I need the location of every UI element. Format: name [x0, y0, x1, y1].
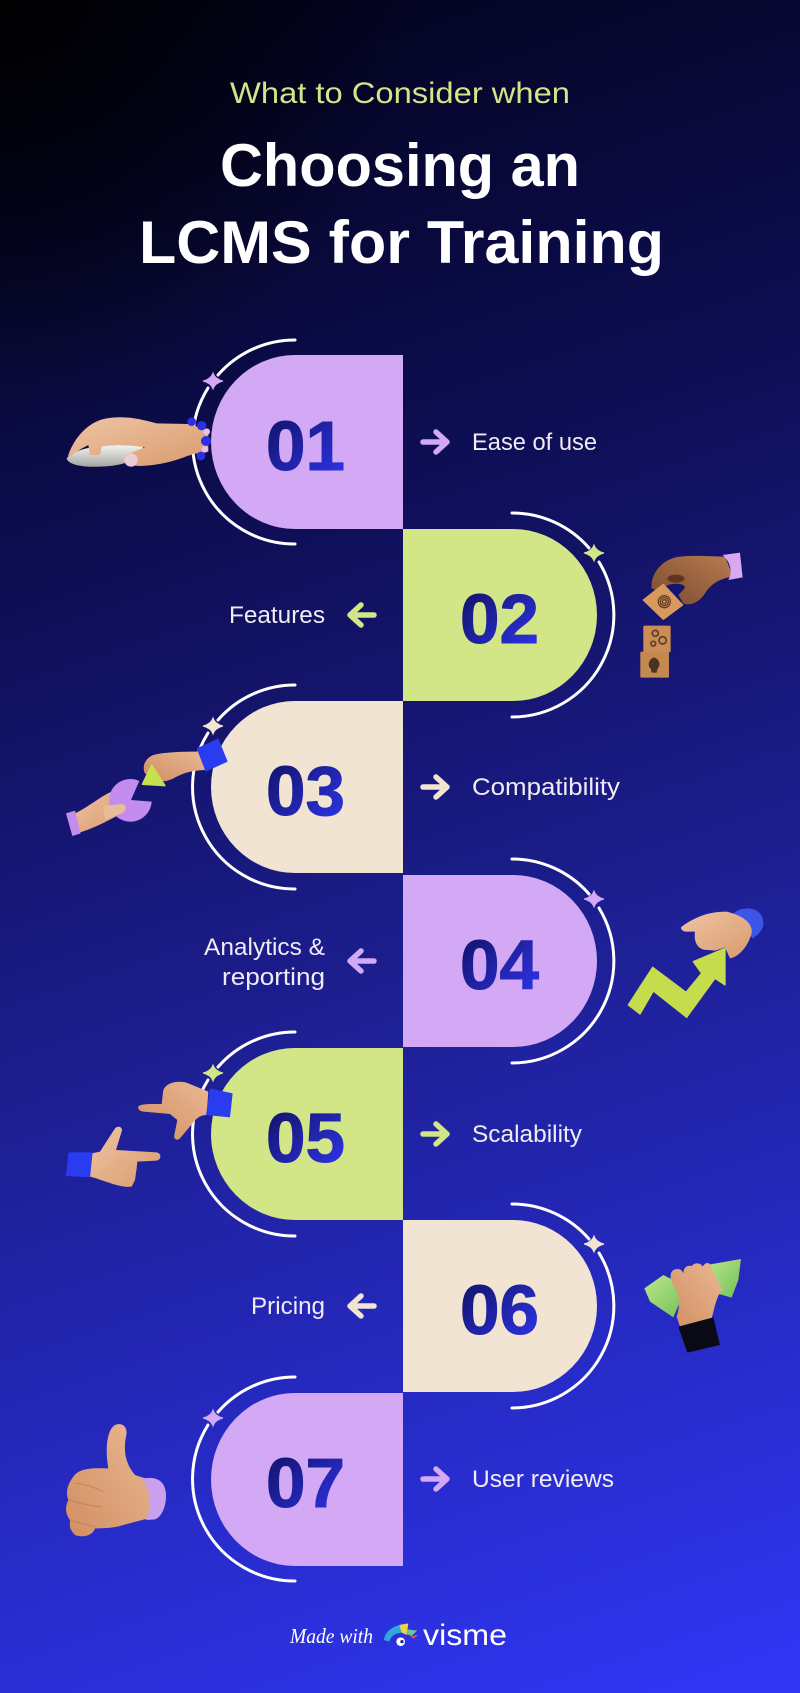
panel 03 — [211, 701, 403, 873]
row 02 — [229, 513, 743, 717]
footer: made with visme — [289, 1619, 507, 1652]
panel 05 — [211, 1048, 403, 1220]
sparkle — [203, 1065, 223, 1081]
label: User reviews — [472, 1466, 614, 1493]
label: Pricing — [251, 1293, 325, 1320]
arrow right — [423, 777, 447, 797]
label: Ease of use — [472, 429, 597, 456]
icon: thumbs up — [66, 1424, 166, 1536]
number 04: 04 — [460, 926, 539, 1004]
icon: hand on mouse — [67, 417, 211, 467]
number 03: 03 — [266, 752, 345, 830]
number 02: 02 — [460, 580, 539, 658]
label: Scalability — [472, 1121, 582, 1148]
row 04 — [204, 859, 763, 1063]
sparkle — [203, 1410, 223, 1426]
row 05 — [66, 1032, 582, 1236]
sparkle — [203, 373, 223, 389]
title: Choosing an — [220, 132, 580, 199]
icon: fist with money — [644, 1259, 741, 1353]
footer: made with visme: visme — [423, 1619, 507, 1652]
icon: hand with blocks — [640, 553, 743, 678]
title: LCMS for Training — [139, 209, 664, 276]
label: reporting — [222, 964, 325, 991]
arrow right — [423, 1124, 447, 1144]
panel 01 — [211, 355, 403, 529]
sparkle — [584, 545, 604, 561]
panel 06 — [403, 1220, 597, 1392]
icon: hands with pie chart — [66, 738, 228, 836]
footer: made with visme: Made with — [289, 1624, 373, 1648]
sparkle — [584, 1236, 604, 1252]
number 06: 06 — [460, 1271, 539, 1349]
row 01 — [67, 340, 597, 544]
sparkle — [203, 718, 223, 734]
arrow left — [350, 1296, 374, 1316]
label: Analytics & — [204, 934, 325, 961]
arrow right — [423, 432, 447, 452]
icon: pointing hands — [66, 1082, 233, 1187]
arrow right — [423, 1469, 447, 1489]
label: Compatibility — [472, 774, 620, 801]
panel 04 — [403, 875, 597, 1047]
arrow left — [350, 951, 374, 971]
panel 02 — [403, 529, 597, 701]
label — [204, 934, 325, 991]
panel 07 — [211, 1393, 403, 1566]
title — [139, 132, 664, 276]
visme logo mark — [384, 1623, 418, 1646]
arrow left — [350, 605, 374, 625]
subtitle: What to Consider when — [230, 77, 570, 110]
icon: hand with rising arrow — [628, 908, 763, 1017]
row 07 — [66, 1377, 614, 1581]
label: Features — [229, 602, 325, 629]
row 06 — [251, 1204, 741, 1408]
number 05: 05 — [266, 1099, 345, 1177]
number 01: 01 — [266, 407, 345, 485]
sparkle — [584, 891, 604, 907]
number 07: 07 — [266, 1444, 345, 1522]
row 03 — [66, 685, 620, 889]
